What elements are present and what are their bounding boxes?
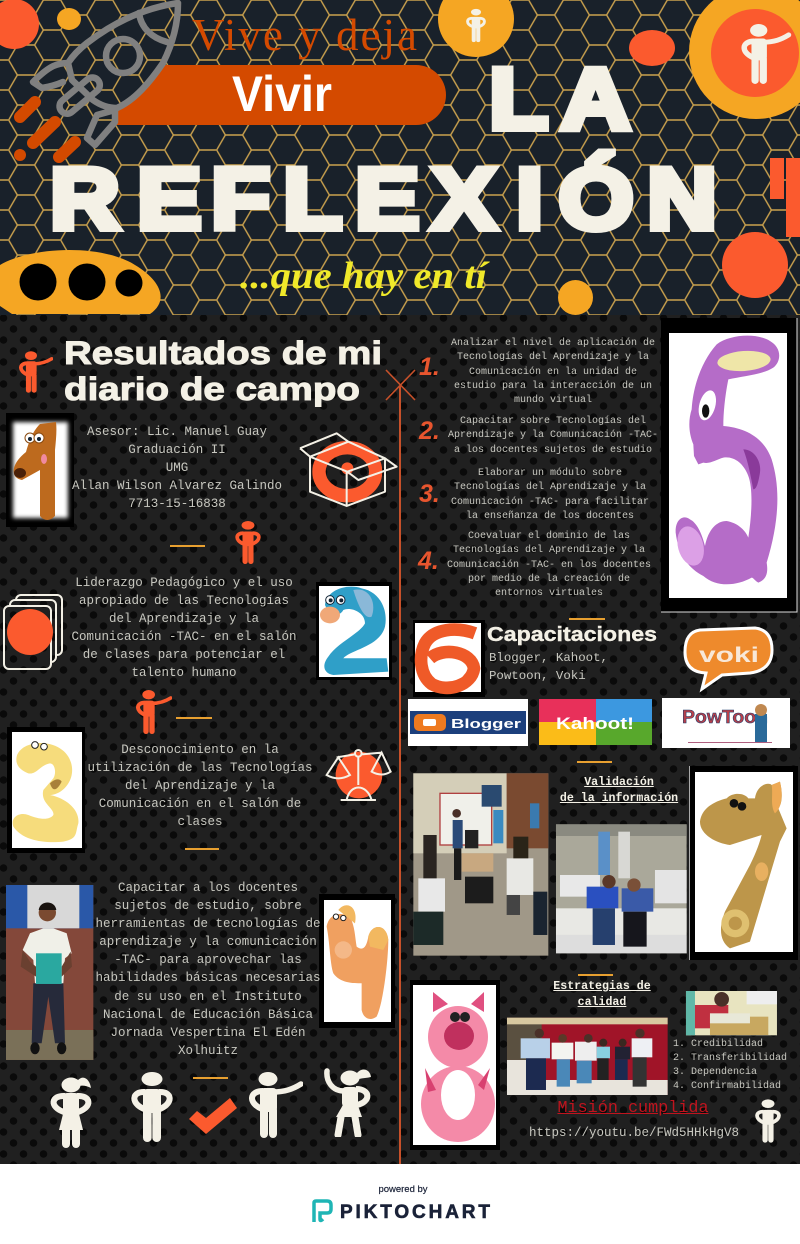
decorative red bars [770, 158, 800, 237]
text: objective 3 [451, 468, 649, 522]
text: leadership paragraph [71, 576, 297, 680]
heading: quality strategies [553, 980, 651, 1009]
text: objective 4: por medio de la creación de [468, 574, 630, 585]
text: problem paragraph: utilización de las Tecnologías [87, 761, 313, 775]
title: Vivir: Vivir [232, 66, 332, 122]
decorative orange circle [558, 280, 593, 315]
text: objective 1: Analizar el nivel de aplicación de [451, 338, 655, 349]
heading: quality strategies: calidad [578, 996, 626, 1009]
photo: student reading [686, 991, 777, 1035]
divider [193, 1077, 228, 1079]
text: objective 2: a los docentes sujetos de estudio [454, 445, 652, 456]
Piktochart wordmark: PIKTOCHART [340, 1202, 490, 1223]
text: objective paragraph: -TAC- para aprovechar las [114, 953, 302, 967]
text: advisor block [72, 425, 282, 511]
panel: body background [0, 315, 800, 1164]
footer panel [0, 1164, 800, 1244]
text: leadership paragraph: Liderazgo Pedagógico y el uso [75, 576, 293, 590]
text: objective paragraph: sujetos de estudio, sobre [114, 899, 302, 913]
logo: Kahoot [539, 699, 652, 745]
text: leadership paragraph: talento humano [131, 666, 237, 680]
mascot 7 giraffe [689, 766, 798, 960]
heading: validation [560, 776, 678, 805]
title: LA: LA [489, 51, 630, 147]
text: objective 4: Comunicación -TAC- en los docentes [447, 560, 651, 571]
icon: person at bottom right [757, 1099, 779, 1143]
heading: Resultados: Resultados de mi [64, 335, 382, 371]
text: advisor block: 7713-15-16838 [128, 497, 226, 511]
divider [185, 848, 219, 850]
list: quality criteria: 1. Credibilidad [673, 1039, 763, 1050]
text: mission accomplished: Misión cumplida [557, 1099, 709, 1118]
text: training tools: Powtoon, Voki [489, 669, 586, 683]
numbered markers: 4. [417, 547, 439, 575]
text: leadership paragraph: del Aprendizaje y la [109, 612, 259, 626]
text: leadership paragraph: apropiado de las Tecnologías [79, 594, 289, 608]
large circle with pointing person [689, 0, 800, 119]
numbered markers: 1. [419, 353, 440, 381]
text: objective 4: Tecnologías del Aprendizaje y la [453, 545, 645, 556]
logo: PowToon [662, 698, 790, 748]
text: objective 1: mundo virtual [514, 395, 592, 406]
photo: group [507, 1018, 668, 1095]
text: objective paragraph: herramientas de tecnologías de [95, 917, 321, 931]
text: objective 3: Tecnologías del Aprendizaje y la [454, 482, 646, 493]
mascot 5 purple [661, 318, 797, 612]
text: advisor block: UMG [166, 461, 188, 475]
mascot 8 pig [410, 980, 500, 1150]
numbered markers [417, 353, 440, 575]
logo: Blogger: Blogger [451, 716, 521, 731]
divider [578, 974, 613, 976]
icon: rocket [33, 3, 178, 145]
list: quality criteria: 2. Transferibilidad [673, 1053, 787, 1064]
heading: diario de campo: diario de campo [64, 371, 360, 407]
text: objective paragraph: Xolhuitz [178, 1044, 238, 1058]
heading: quality strategies: Estrategias de [553, 980, 651, 993]
text: objective 1: Comunicación en la unidad de [469, 367, 637, 378]
text: objective 1 [451, 338, 655, 406]
text: problem paragraph: del Aprendizaje y la [125, 779, 275, 793]
text: objective paragraph: Nacional de Educación Básica [103, 1008, 313, 1022]
text: problem paragraph [87, 743, 313, 829]
text: objective 2: Aprendizaje y la Comunicación -TAC- [448, 430, 658, 441]
text: training tools: Blogger, Kahoot, [489, 651, 608, 665]
divider [569, 618, 605, 620]
mascot 1 dog [6, 413, 74, 527]
logo: PowToon: PowToon [682, 707, 768, 727]
decorative circle top left [0, 0, 39, 49]
panel: header background [0, 0, 800, 315]
Piktochart logo [314, 1201, 331, 1222]
numbered markers: 3. [419, 480, 440, 508]
icon: scale [327, 750, 391, 800]
icon: check mark [189, 1098, 237, 1134]
list: quality criteria: 3. Dependencia [673, 1067, 757, 1078]
heading: validation: de la información [560, 792, 678, 805]
text: problem paragraph: Comunicación en el salón de [99, 797, 301, 811]
logo: Blogger [408, 699, 528, 746]
text: objective paragraph: aprendizaje y la comunicación [99, 935, 317, 949]
decorative red circle [722, 232, 788, 298]
title: Vive y deja: Vive y deja [192, 10, 417, 60]
text: leadership paragraph: Comunicación -TAC- en el salón [71, 630, 297, 644]
text: problem paragraph: Desconocimiento en la [121, 743, 279, 757]
text: objective paragraph [95, 881, 321, 1058]
logo: Voki: voki [699, 644, 759, 667]
photo: two men [556, 824, 687, 953]
powered by: powered by [378, 1184, 428, 1195]
list: quality criteria: 4. Confirmabilidad [673, 1081, 781, 1092]
text: video link: https://youtu.be/FWd5HHkHgV8 [529, 1126, 739, 1140]
divider [176, 717, 212, 719]
text: objective paragraph: Capacitar a los docentes [118, 881, 298, 895]
decorative small orange circle [57, 8, 81, 30]
icon: graduation cap box [300, 433, 397, 506]
list: quality criteria [673, 1038, 787, 1092]
text: objective 3: Comunicación -TAC- para facilitar [451, 497, 649, 508]
text: training tools [489, 651, 608, 683]
logo: Voki [685, 628, 772, 689]
text: objective 4: entornos virtuales [495, 588, 603, 599]
logo: Kahoot: Kahoot! [556, 714, 634, 733]
text: objective 1: estudio para la interacción de un [454, 381, 652, 392]
orange blob with black dots [0, 250, 161, 314]
text: objective 3: Elaborar un módulo sobre [478, 468, 622, 479]
mascot 3 yellow [7, 727, 85, 853]
text: objective paragraph: de su uso en el Instituto [114, 990, 302, 1004]
photo: student with diploma [6, 885, 93, 1060]
mascot 4 orange [319, 894, 395, 1028]
banner pill [117, 65, 446, 125]
divider with red person [170, 521, 259, 564]
heading: Capacitaciones: Capacitaciones [487, 624, 657, 646]
subtitle: que hay en ti: ...que hay en tí [240, 255, 491, 297]
text: objective 4 [447, 530, 651, 599]
mascot 6 snake [413, 620, 485, 697]
divider [577, 761, 612, 763]
text: advisor block: Allan Wilson Alvarez Galindo [72, 479, 282, 493]
icon: red pointing person small [138, 690, 171, 734]
decorative red ellipse [629, 30, 675, 66]
icon: red pointing person [21, 351, 52, 393]
text: advisor block: Graduación II [128, 443, 226, 457]
text: objective 2: Capacitar sobre Tecnologías del [460, 416, 646, 427]
text: problem paragraph: clases [177, 815, 223, 829]
heading: validation: Validación [584, 776, 654, 789]
mascot 2 blue [316, 582, 392, 680]
text: leadership paragraph: de clases para potenciar el [83, 648, 285, 662]
title: REFLEXIÓN: REFLEXIÓN [50, 151, 717, 247]
rocket flames [14, 102, 75, 161]
text: objective 1: Tecnologías del Aprendizaje y la [457, 352, 649, 363]
text: objective 3: la enseñanza de los docentes [466, 511, 634, 522]
text: objective 4: Coevaluar el dominio de las [468, 531, 630, 542]
photo: classroom [413, 773, 548, 956]
text: objective paragraph: Jornada Vespertina El Edén [110, 1026, 306, 1040]
text: objective 2 [448, 416, 658, 456]
icon: stacked cards [4, 595, 62, 669]
icons: four figures [54, 1070, 371, 1148]
circle with small person icon [438, 0, 514, 57]
text: advisor block: Asesor: Lic. Manuel Guay [87, 425, 267, 439]
numbered markers: 2. [418, 417, 440, 445]
text: objective paragraph: habilidades básicas necesarias [95, 971, 321, 985]
center vertical line with cross [386, 370, 415, 1164]
